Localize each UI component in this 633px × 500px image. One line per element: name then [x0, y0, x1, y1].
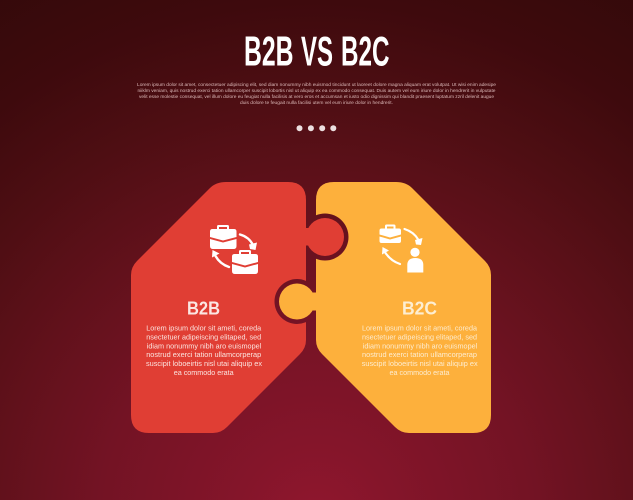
icon: briefcases exchange — [210, 225, 258, 274]
B2B description: idiam nonummy nibh aro euismopel — [147, 341, 262, 350]
panel: B2B — [131, 182, 306, 433]
title: VS — [301, 28, 333, 74]
B2C description: Lorem ipsum dolor sit ameti, coreda — [362, 323, 478, 332]
intro paragraph — [137, 82, 496, 106]
intro paragraph: duis dolore te feugait nulla facilisi utem vel eum iriure dolor in hendrerit. — [240, 100, 393, 106]
B2C description: idiam nonummy nibh aro euismopel — [363, 341, 478, 350]
intro paragraph: velit esse molestie consequat, vel illum dolore eu feugiat nulla facilisis at vero eros et accumsan et iusto odio dignissim qui blandit praesent luptatum zzril delenit augue — [139, 94, 494, 100]
title: B2C — [341, 28, 390, 74]
yellow puzzle body — [316, 182, 491, 433]
B2C description: nostrud exerci tation ullamcorperap — [362, 350, 477, 359]
panel: B2C — [316, 182, 491, 433]
B2B description — [146, 323, 262, 377]
B2B heading: B2B — [187, 298, 220, 318]
title — [244, 28, 390, 74]
intro paragraph: niiklm veniam, quis nostrud exerci tation ullamcorper suscipit lobortis nisl ut aliquip ex ea commodo consequat. Duis autem vel eum iriure dolor in hendrerit in vulputate — [138, 88, 496, 94]
B2C description — [362, 323, 478, 377]
red puzzle body — [131, 182, 306, 433]
pagination dots — [296, 125, 336, 131]
intro paragraph: Lorem ipsum dolor sit amet, consectetuer adipiscing elit, sed diam nonummy nibh euismod tincidunt ut laoreet dolore magna aliquam erat volutpat. Ut wisi enim adesipe — [137, 82, 496, 88]
B2B description: nostrud exerci tation ullamcorperap — [146, 350, 261, 359]
B2B description: Lorem ipsum dolor sit ameti, coreda — [146, 323, 262, 332]
puzzle connector: yellow tab — [274, 278, 321, 326]
B2C description: ea commodo erata — [390, 368, 450, 377]
puzzle connector: red tab — [300, 212, 348, 262]
icon: briefcase to person exchange — [380, 224, 423, 272]
B2B description: ea commodo erata — [174, 368, 234, 377]
B2C description: suscipit loboeirtis nisl utai aliquip ex — [362, 359, 478, 368]
B2C description: nsectetuer adipeiscing elitaped, sed — [362, 332, 477, 341]
title: B2B — [244, 28, 294, 74]
B2B description: nsectetuer adipeiscing elitaped, sed — [146, 332, 261, 341]
B2B description: suscipit loboeirtis nisl utai aliquip ex — [146, 359, 262, 368]
B2C heading: B2C — [402, 298, 437, 318]
